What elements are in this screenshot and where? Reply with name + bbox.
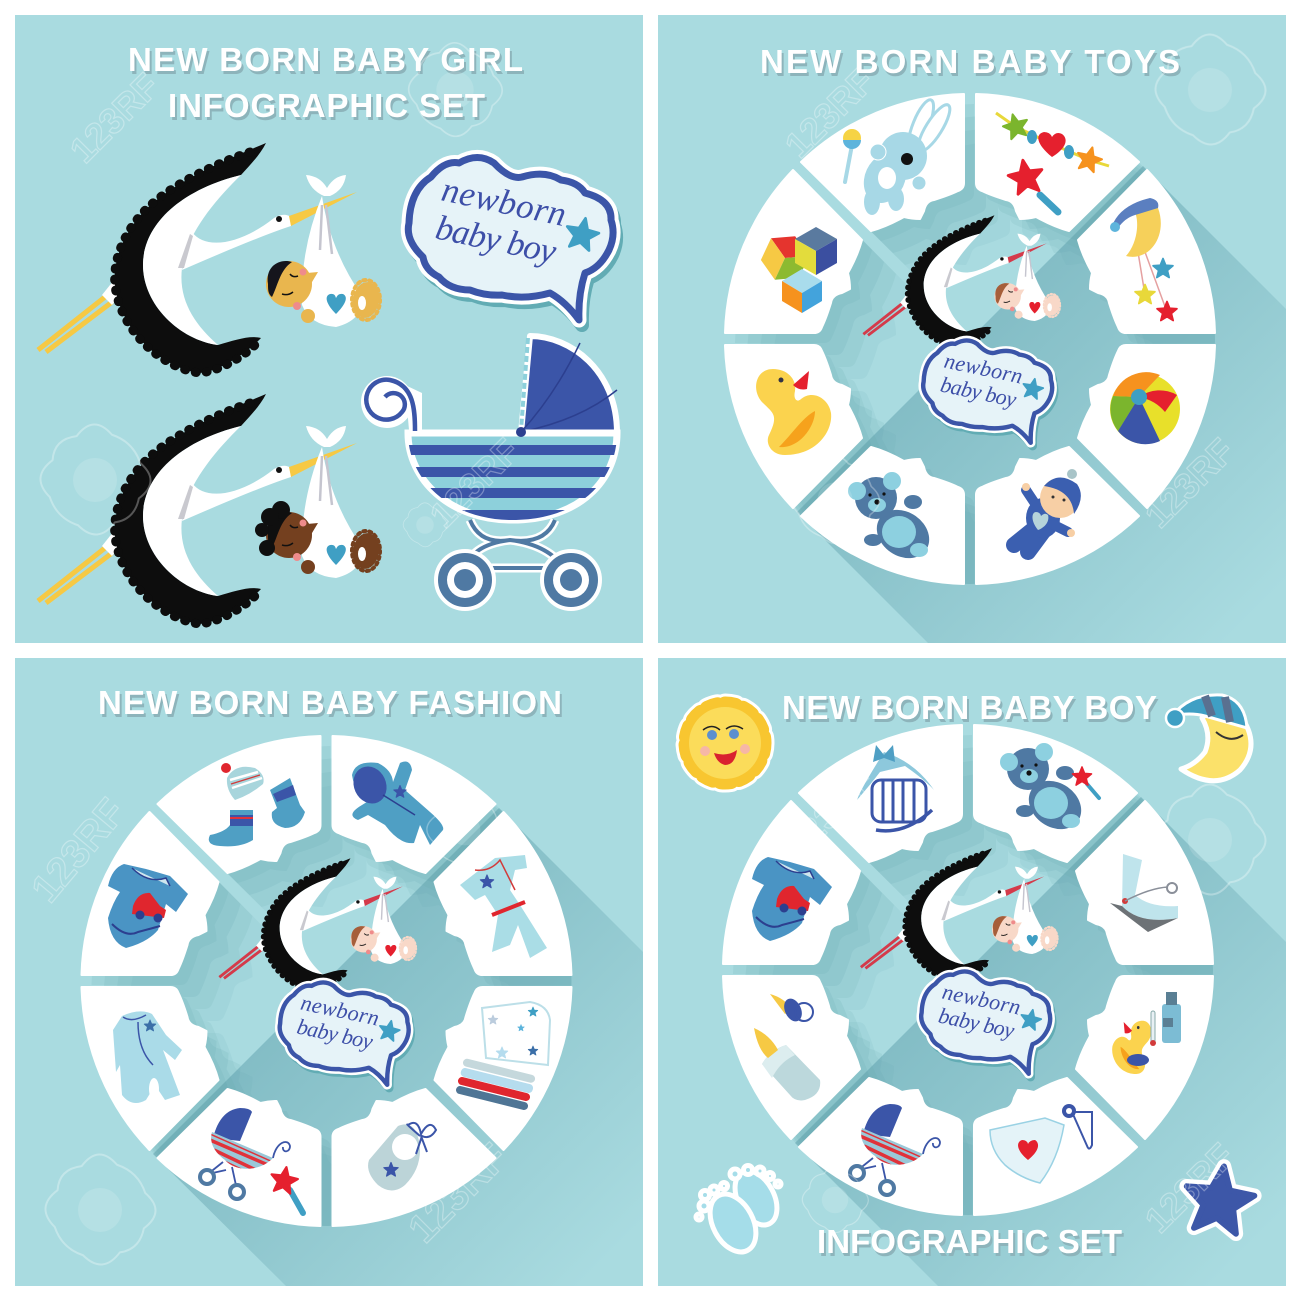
watermarks: 123RF <box>23 791 134 911</box>
watermarks: 123RF <box>400 1135 516 1251</box>
icon: bear and rattle <box>1000 743 1099 839</box>
icon: star chain and rattle <box>996 111 1109 212</box>
icon: crib <box>857 745 934 831</box>
panel: new born baby fashion <box>15 658 643 1286</box>
panel: new born baby boy <box>658 658 1286 1286</box>
icon: small speech bubble: newborn <box>942 348 1025 389</box>
icon: newborn baby boy speech bubble: baby boy <box>432 208 560 271</box>
icon: hat and socks <box>209 763 305 846</box>
icon: baby footprints <box>696 1164 786 1260</box>
icon: bib <box>368 1123 436 1190</box>
chart: toys wheel <box>725 94 1261 630</box>
icon: moon mobile <box>1110 198 1177 321</box>
icon: blue striped pram <box>361 336 630 609</box>
title: new born baby girl: NEW BORN BABY GIRL <box>128 41 523 78</box>
watermarks: 123RF <box>62 65 167 171</box>
panel: new born baby toys <box>658 15 1286 643</box>
title: new born baby fashion: NEW BORN BABY FASHION <box>98 684 562 721</box>
title: new born baby boy: NEW BORN BABY BOY <box>782 689 1157 726</box>
watermarks: 123RF <box>1137 1135 1242 1241</box>
chart: boy wheel <box>723 725 1259 1261</box>
icon: sleeping moon with cap <box>1166 695 1251 781</box>
icon: bottle and pacifier <box>754 994 820 1100</box>
icon: teddy bear <box>848 472 939 568</box>
panel: new born baby girl <box>15 15 643 643</box>
icon: stork with dark baby <box>38 394 381 624</box>
watermarks: 123RF <box>1137 430 1242 536</box>
icon: bassinet <box>1110 854 1178 932</box>
watermarks <box>23 781 516 1280</box>
icon: small speech bubble <box>280 982 411 1088</box>
icon: small stork <box>219 858 417 990</box>
subtitle: infographic set: INFOGRAPHIC SET <box>817 1223 1122 1260</box>
icon: small speech bubble: baby boy <box>936 1003 1017 1043</box>
watermarks <box>24 30 527 553</box>
icon: pale blue pajama <box>113 1011 182 1103</box>
icon: blue sleeper <box>347 761 443 845</box>
icon: small speech bubble: newborn <box>940 979 1023 1020</box>
watermarks <box>777 19 1280 556</box>
icon: small stork <box>861 848 1058 980</box>
chart: fashion wheel <box>82 736 618 1272</box>
icon: small speech bubble <box>921 971 1052 1077</box>
icon: blue star <box>1181 1162 1258 1236</box>
watermarks: 123RF <box>777 60 882 166</box>
icon: small stork <box>863 215 1061 347</box>
subtitle: infographic set: INFOGRAPHIC SET <box>168 87 485 124</box>
icon: striped pram <box>850 1104 940 1195</box>
title: new born baby toys: NEW BORN BABY TOYS <box>760 43 1180 80</box>
long shadow: boy wheel <box>795 797 1286 1286</box>
icon: rattle and bunny <box>843 97 955 215</box>
icon: newborn baby boy speech bubble: newborn <box>438 170 570 234</box>
icon: bodysuit with car <box>108 864 188 948</box>
icon: small speech bubble: baby boy <box>295 1014 375 1054</box>
icon: towel and stack <box>455 1002 550 1111</box>
icon: toy cubes <box>756 227 837 313</box>
watermarks: 123RF <box>777 760 882 866</box>
icon: small speech bubble: newborn <box>299 990 381 1031</box>
icon: newborn baby boy speech bubble <box>408 158 616 325</box>
icon: duck, thermometer and lotion <box>1112 992 1181 1074</box>
long shadow: fashion wheel <box>153 808 643 1286</box>
icon: diaper and safety pin <box>990 1104 1092 1183</box>
icon: striped pram and star rattle <box>200 1108 303 1213</box>
watermarks: 123RF <box>422 430 527 536</box>
icon: baby in blue suit <box>1014 469 1081 552</box>
icon: stork with light baby <box>38 143 381 373</box>
icon: bodysuit with car <box>752 857 832 941</box>
icon: small speech bubble: baby boy <box>938 372 1019 412</box>
long shadow: toys wheel <box>797 166 1286 643</box>
icon: onesie with red belt <box>460 855 547 958</box>
icon: sun <box>687 705 763 781</box>
icon: small speech bubble <box>923 340 1054 446</box>
icon: rubber duck <box>756 369 831 455</box>
icon: beach ball <box>1110 372 1180 444</box>
watermarks <box>777 760 1280 1242</box>
